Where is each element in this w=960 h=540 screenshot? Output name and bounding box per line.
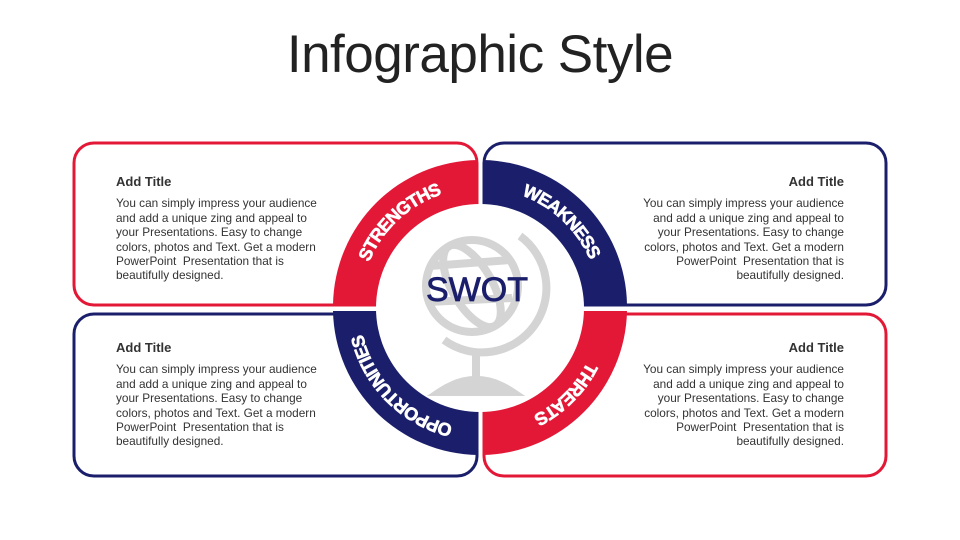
label: weakness: WEAKNESS xyxy=(524,183,600,259)
text block: strengths: Add Title xyxy=(116,174,171,189)
panel: bottom-left box xyxy=(74,314,477,476)
ring: opportunities xyxy=(333,311,478,455)
text block: weakness: You can simply impress your audience and add a unique zing and appeal to your Presentations. Easy to change colors, photos and Text. Get a modern PowerPoint Presentation that is beautifully designed. xyxy=(643,196,844,282)
label: threats: THREATS xyxy=(534,365,598,426)
text block: threats: Add Title xyxy=(789,340,844,355)
ring: weakness xyxy=(483,160,627,305)
swot text: SWOT xyxy=(426,271,528,309)
text block: threats: You can simply impress your audience and add a unique zing and appeal to your Presentations. Easy to change colors, photos and Text. Get a modern PowerPoint Presentation that is beautifully designed. xyxy=(643,362,844,448)
text block: opportunities: Add Title xyxy=(116,340,171,355)
ring: threats xyxy=(483,311,627,455)
ring: strengths xyxy=(333,160,478,305)
panel: top-left box xyxy=(74,143,477,305)
panel: bottom-right box xyxy=(484,314,886,476)
text block: opportunities: You can simply impress your audience and add a unique zing and appeal to your Presentations. Easy to change colors, photos and Text. Get a modern PowerPoint Presentation that is beautifully designed. xyxy=(116,362,317,448)
center white circle xyxy=(376,204,584,412)
label: strengths: STRENGTHS xyxy=(359,184,441,261)
title: Infographic Style xyxy=(287,25,673,84)
text block: weakness: Add Title xyxy=(789,174,844,189)
panel: top-right box xyxy=(484,143,886,305)
label: opportunities: OPPORTUNITIES xyxy=(352,335,452,436)
icon: globe xyxy=(426,236,546,392)
text block: strengths: You can simply impress your audience and add a unique zing and appeal to your Presentations. Easy to change colors, photos and Text. Get a modern PowerPoint Presentation that is beautifully designed. xyxy=(116,196,317,282)
